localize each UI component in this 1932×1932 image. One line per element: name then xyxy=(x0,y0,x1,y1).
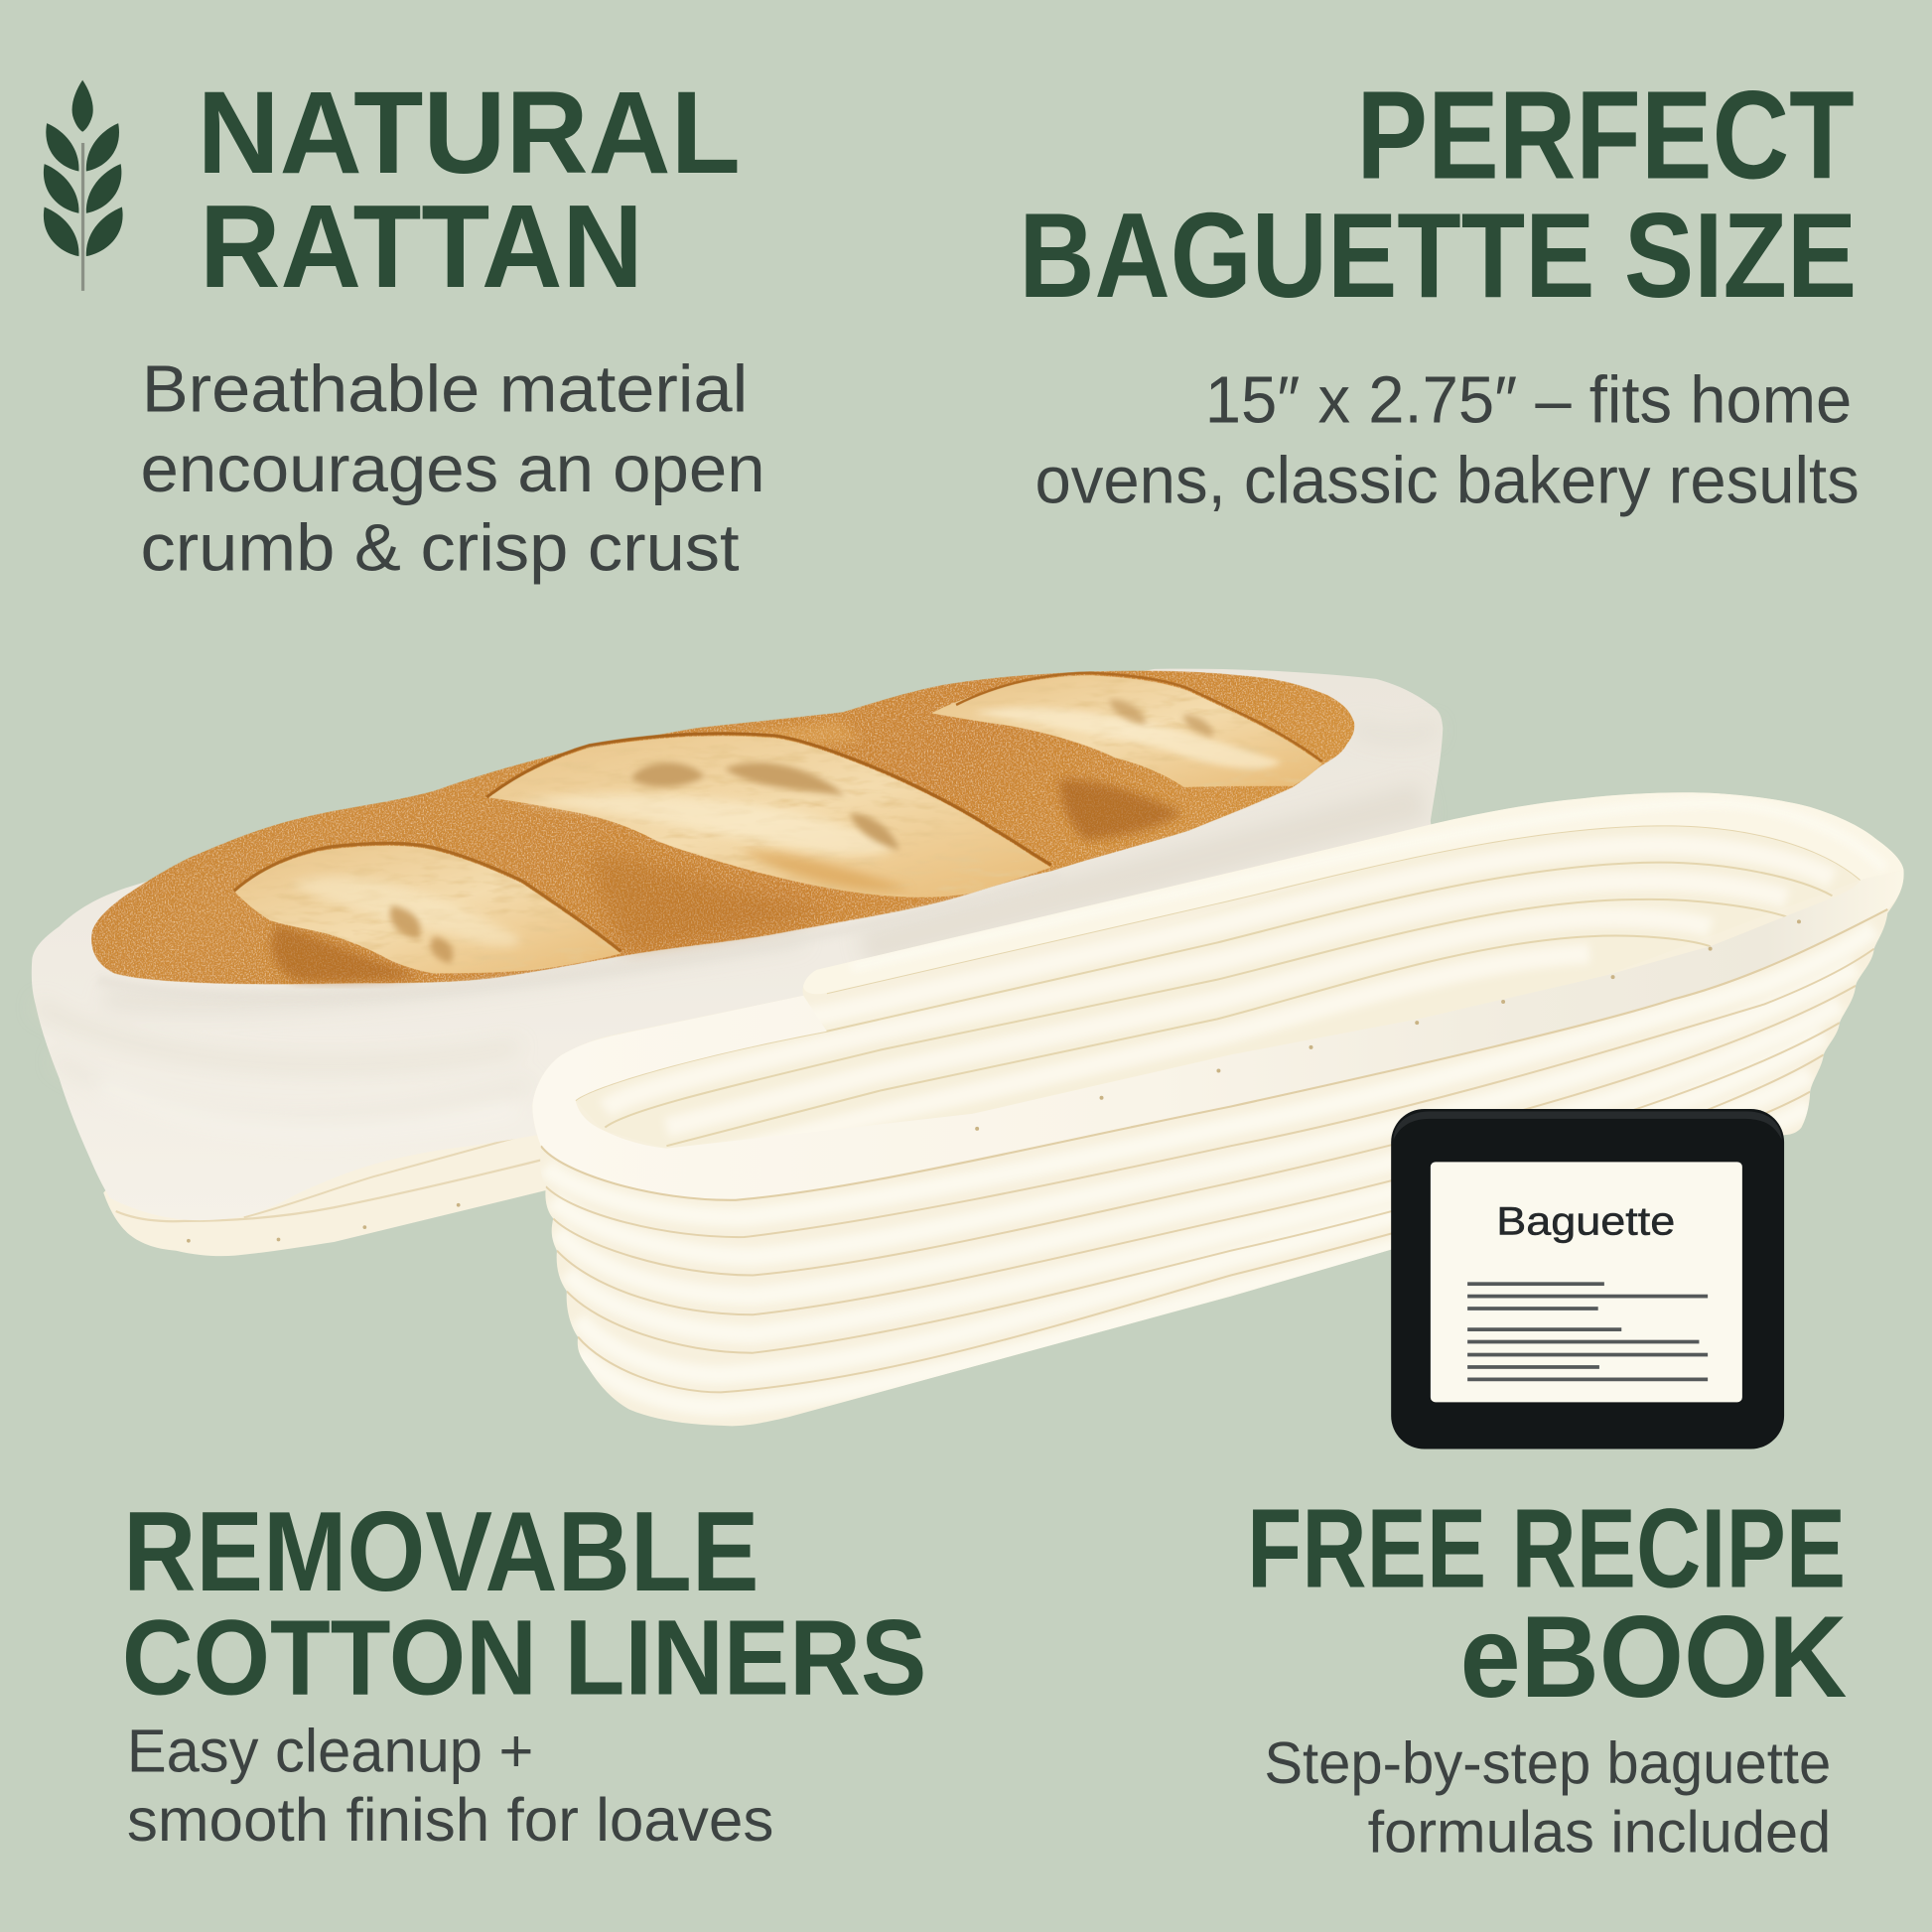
heading: removable cotton liners xyxy=(122,1489,926,1717)
heading: perfect baguette size xyxy=(1019,64,1857,323)
top coil shading xyxy=(850,803,1885,967)
text: liner description: Easy cleanup + xyxy=(127,1718,533,1785)
heading: natural rattan xyxy=(198,67,741,313)
heading: free recipe ebook xyxy=(1247,1485,1847,1722)
heading: removable cotton liners: REMOVABLE xyxy=(123,1489,759,1615)
heading: natural rattan: NATURAL xyxy=(198,67,741,198)
text: size description xyxy=(1035,363,1860,517)
interior coil lines xyxy=(576,825,1861,1146)
ebook tablet xyxy=(1391,1109,1784,1449)
text: liner description xyxy=(127,1718,773,1854)
interior floor xyxy=(576,801,1861,1149)
text: liner description: smooth finish for loaves xyxy=(127,1786,773,1854)
basket base xyxy=(103,1109,579,1256)
interior coil highlights xyxy=(576,845,1832,1164)
text: size description: ovens, classic bakery results xyxy=(1035,443,1860,517)
basket silhouette xyxy=(532,792,1904,1426)
heading: perfect baguette size: PERFECT xyxy=(1356,64,1855,205)
text: natural rattan description xyxy=(140,352,765,586)
ebook title: Baguette xyxy=(1496,1200,1675,1244)
crumb air pockets xyxy=(630,762,899,850)
slash 2 crumb xyxy=(486,736,1051,897)
heading: free recipe ebook: eBOOK xyxy=(1460,1591,1847,1722)
rim lower edge xyxy=(541,909,1887,1200)
stitch marks xyxy=(187,919,1801,1243)
crust xyxy=(91,671,1354,984)
left basket with cotton liner xyxy=(32,669,1443,1256)
heading: removable cotton liners: COTTON LINERS xyxy=(122,1596,926,1717)
text: ebook description: Step-by-step baguette xyxy=(1264,1729,1831,1796)
text: natural rattan description: crumb & crisp crust xyxy=(140,511,740,586)
crust shading xyxy=(271,924,419,982)
baguette loaf xyxy=(91,671,1354,984)
top coil with free end xyxy=(803,792,1903,994)
text: size description: 15″ x 2.75″ – fits home xyxy=(1205,363,1852,438)
text: natural rattan description: encourages an open xyxy=(140,432,765,506)
tablet body xyxy=(1391,1109,1784,1449)
ebook text lines xyxy=(1467,1282,1708,1381)
icon: wheat sprig xyxy=(44,80,123,291)
liner folds xyxy=(37,727,1436,1130)
text: ebook description: formulas included xyxy=(1368,1798,1831,1864)
slash 1 crumb xyxy=(234,846,621,973)
right rattan basket xyxy=(187,792,1904,1426)
exterior coil lines xyxy=(546,949,1874,1392)
text: ebook description xyxy=(1264,1729,1831,1864)
cotton liner xyxy=(32,669,1443,1220)
exterior coil highlights xyxy=(546,929,1874,1407)
tablet screen xyxy=(1431,1162,1742,1402)
text: natural rattan description: Breathable material xyxy=(142,352,748,427)
basket rim xyxy=(532,870,1904,1200)
liner lip under loaf xyxy=(98,878,1059,998)
heading: natural rattan: RATTAN xyxy=(200,181,643,313)
slash 3 crumb xyxy=(931,675,1322,787)
